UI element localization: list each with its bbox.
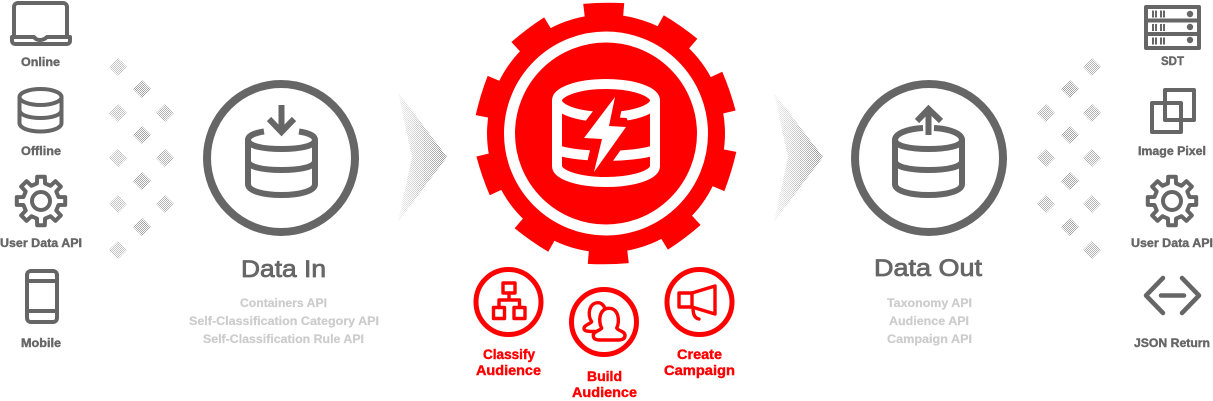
icon: mobile phone (27, 271, 57, 322)
label: Mobile: Mobile (21, 338, 61, 350)
label: User Data API: User Data API (1131, 238, 1213, 250)
panel: build audience (572, 290, 638, 400)
icon: org chart (476, 270, 541, 334)
list: data in APIs: Self-Classification Rule API (203, 334, 364, 346)
icon: people (572, 290, 636, 354)
icon: database (20, 89, 62, 132)
arrow: right chevron (774, 93, 823, 222)
icon: gear (1148, 177, 1196, 225)
panel: data in (189, 84, 379, 346)
icon: data in circle (207, 84, 355, 232)
panel: central gear (475, 2, 737, 265)
icon: code brackets (1146, 278, 1199, 313)
panel: data destinations (1131, 7, 1213, 350)
list: data out APIs (887, 298, 972, 346)
label: SDT: SDT (1161, 56, 1184, 68)
icon: megaphone (667, 270, 732, 334)
label: Build Audience: Audience (572, 385, 638, 400)
label: Create Campaign: Campaign (664, 363, 735, 378)
dotted diamonds: left (109, 58, 174, 259)
list: data in APIs (189, 298, 379, 346)
label: Classify Audience (476, 347, 542, 378)
label: JSON Return: JSON Return (1134, 338, 1210, 350)
panel: data sources (0, 3, 82, 350)
arrow: left chevron (398, 92, 447, 222)
label: Online: Online (21, 57, 60, 69)
panel: create campaign (664, 270, 735, 378)
panel: classify audience (476, 270, 542, 378)
heading: Data In: Data In (241, 256, 326, 283)
dotted diamonds: right (1037, 58, 1101, 259)
label: Classify Audience: Classify (483, 347, 535, 362)
gear shape (475, 2, 737, 265)
label: Classify Audience: Audience (476, 363, 542, 378)
list: data out APIs: Taxonomy API (887, 298, 972, 310)
list: data out APIs: Campaign API (887, 334, 972, 346)
panel: data out (855, 84, 1003, 346)
icon: data out circle (855, 84, 1003, 232)
label: User Data API: User Data API (0, 238, 82, 250)
label: Offline: Offline (21, 146, 61, 158)
list: data in APIs: Self-Classification Category API (189, 316, 379, 328)
list: data in APIs: Containers API (240, 298, 327, 310)
label: Build Audience: Build (587, 369, 622, 384)
icon: overlapping squares (1152, 90, 1194, 132)
label: Create Campaign (664, 347, 735, 378)
icon: database with lightning bolt (557, 84, 655, 182)
label: Build Audience (572, 369, 638, 400)
icon: server rack (1146, 7, 1199, 48)
label: Create Campaign: Create (677, 347, 723, 362)
icon: laptop (12, 3, 70, 44)
icon: gear (17, 177, 65, 225)
list: data out APIs: Audience API (889, 316, 969, 328)
heading: Data Out: Data Out (874, 255, 982, 282)
label: Image Pixel: Image Pixel (1138, 146, 1206, 158)
